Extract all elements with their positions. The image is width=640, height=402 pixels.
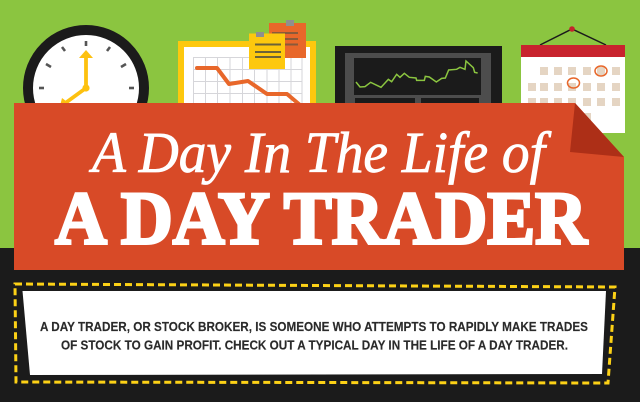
icon: trading monitor [335,46,502,106]
dashed border [15,284,615,383]
icon: yellow sticky note [249,32,285,69]
stock line [356,61,478,87]
green background [0,0,640,248]
icon: clock [28,30,144,146]
banner fold [570,103,624,157]
title: script line: A Day In The Life of [88,120,552,185]
icon: wall calendar [521,26,625,133]
panel: intro box [15,284,615,383]
intro text: OF STOCK TO GAIN PROFIT. CHECK OUT A TYPICAL DAY IN THE LIFE OF A DAY TRADER. [61,338,568,352]
dark background [0,248,640,402]
intro text [40,320,588,352]
panel: title banner [14,103,624,270]
intro text: A DAY TRADER, OR STOCK BROKER, IS SOMEONE WHO ATTEMPTS TO RAPIDLY MAKE TRADES [40,320,588,334]
icon: orange sticky note [269,20,306,58]
panel: chart board [178,41,316,111]
falling trend line [197,68,300,105]
white card [22,291,606,375]
title: slab line: A DAY TRADER [55,178,588,260]
